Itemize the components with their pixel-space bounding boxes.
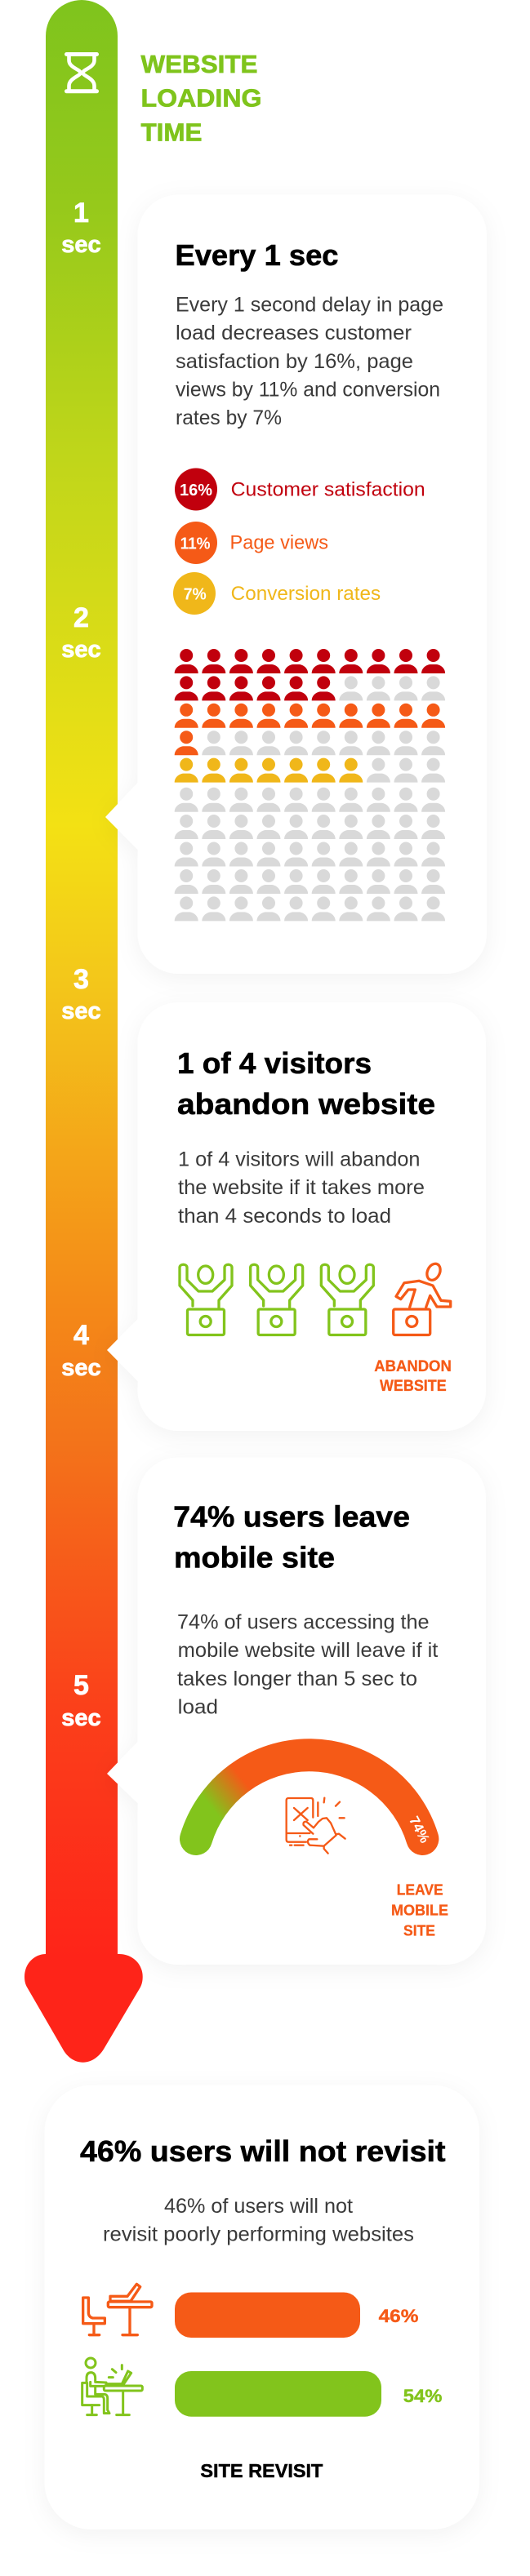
text block: rates by 7% bbox=[176, 406, 282, 429]
card background bbox=[45, 2085, 479, 2529]
text block: Every 1 second delay in page bbox=[176, 294, 443, 317]
people chart bbox=[175, 649, 445, 921]
icon: visitor staying 3 bbox=[321, 1264, 373, 1335]
heading: mobile site bbox=[174, 1541, 335, 1574]
label: leave mobile site: SITE bbox=[403, 1923, 435, 1939]
panel: every 1 sec bbox=[105, 194, 487, 974]
label: 1 sec: sec bbox=[61, 232, 101, 258]
panel: 46% users will not revisit bbox=[45, 2085, 479, 2529]
heading: abandon website bbox=[177, 1087, 435, 1121]
text block: 74% of users accessing the bbox=[177, 1611, 430, 1634]
legend: page views: Page views bbox=[230, 532, 328, 554]
text block bbox=[177, 1611, 438, 1719]
text block: revisit poorly performing websites bbox=[103, 2223, 414, 2245]
heading: Every 1 sec bbox=[175, 238, 338, 272]
title bbox=[140, 50, 261, 147]
panel: 1 of 4 visitors bbox=[107, 1002, 486, 1431]
label: 5 sec: 5 bbox=[73, 1670, 89, 1701]
caption: SITE REVISIT bbox=[200, 2460, 323, 2481]
text block: load decreases customer bbox=[176, 322, 412, 344]
icon: empty desk bbox=[83, 2284, 152, 2335]
label: 3 sec: sec bbox=[61, 998, 101, 1024]
timeline labels bbox=[61, 198, 101, 1731]
label: 5 sec: sec bbox=[61, 1705, 101, 1731]
icon: tapping phone bbox=[287, 1798, 345, 1854]
value: 54%: 54% bbox=[403, 2386, 442, 2406]
bar: 46% bbox=[175, 2292, 360, 2338]
title: LOADING bbox=[140, 83, 261, 113]
label: 4 sec bbox=[61, 1320, 101, 1381]
text block: views by 11% and conversion bbox=[176, 379, 440, 402]
heading: 46% users will not revisit bbox=[80, 2134, 446, 2168]
card background with pointer bbox=[105, 194, 487, 974]
icon: hourglass bbox=[67, 54, 96, 91]
label: 3 sec bbox=[61, 964, 101, 1024]
legend: page views bbox=[175, 522, 328, 564]
legend: conversion rates: 7% bbox=[184, 586, 207, 604]
label: 5 sec bbox=[61, 1670, 101, 1731]
label: leave mobile site: MOBILE bbox=[391, 1903, 448, 1919]
label: leave mobile site: LEAVE bbox=[397, 1882, 443, 1899]
card background with pointer bbox=[107, 1458, 486, 1965]
icon: person at desk bbox=[82, 2358, 142, 2415]
heading: 74% users leave bbox=[173, 1500, 410, 1534]
label: 3 sec: 3 bbox=[73, 964, 89, 995]
text block bbox=[176, 294, 443, 429]
icon: visitor staying 1 bbox=[180, 1264, 232, 1335]
legend: conversion rates: Conversion rates bbox=[231, 583, 381, 605]
icon: visitor leaving bbox=[394, 1262, 451, 1335]
legend: customer satisfaction: Customer satisfaction bbox=[231, 479, 425, 501]
heading: 1 of 4 visitors bbox=[177, 1046, 372, 1080]
heading bbox=[177, 1046, 435, 1121]
label: 2 sec: 2 bbox=[73, 602, 89, 633]
legend: page views: 11% bbox=[180, 535, 211, 553]
legend: customer satisfaction bbox=[175, 469, 425, 511]
label: abandon website bbox=[374, 1358, 452, 1395]
text block: load bbox=[178, 1696, 218, 1719]
legend: conversion rates bbox=[173, 572, 381, 615]
title: TIME bbox=[140, 118, 203, 147]
label: 2 sec bbox=[61, 602, 101, 663]
text block: 1 of 4 visitors will abandon bbox=[178, 1148, 420, 1171]
label: leave mobile site bbox=[391, 1882, 448, 1939]
gauge value: 74% bbox=[406, 1814, 433, 1845]
card background with pointer bbox=[107, 1002, 486, 1431]
text block: mobile website will leave if it bbox=[178, 1639, 438, 1662]
legend: customer satisfaction: 16% bbox=[180, 482, 212, 500]
label: abandon website: WEBSITE bbox=[380, 1378, 447, 1395]
text block bbox=[178, 1148, 425, 1228]
value: 46%: 46% bbox=[379, 2306, 418, 2326]
text block: 46% of users will not bbox=[164, 2195, 353, 2218]
gauge chart bbox=[196, 1755, 422, 1839]
label: 4 sec: sec bbox=[61, 1355, 101, 1381]
timeline arrow bbox=[24, 0, 143, 2063]
text block: takes longer than 5 sec to bbox=[177, 1668, 417, 1690]
title: WEBSITE bbox=[140, 50, 258, 78]
text block bbox=[103, 2195, 414, 2245]
label: 4 sec: 4 bbox=[73, 1320, 89, 1351]
text block: than 4 seconds to load bbox=[178, 1205, 391, 1228]
bar: 54% bbox=[175, 2371, 381, 2417]
text block: the website if it takes more bbox=[178, 1176, 425, 1199]
heading bbox=[173, 1500, 410, 1574]
label: 1 sec bbox=[61, 198, 101, 258]
panel: 74% users leave bbox=[107, 1458, 486, 1965]
text block: satisfaction by 16%, page bbox=[176, 350, 413, 373]
label: abandon website: ABANDON bbox=[374, 1358, 452, 1375]
icon: visitor staying 2 bbox=[251, 1264, 303, 1335]
label: 1 sec: 1 bbox=[73, 198, 89, 229]
label: 2 sec: sec bbox=[61, 637, 101, 663]
